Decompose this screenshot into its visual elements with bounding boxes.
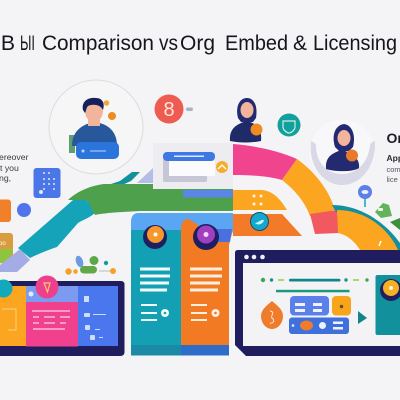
arc: red segment (310, 210, 339, 234)
status row (261, 278, 369, 282)
icon: blue keypad tile (34, 168, 60, 198)
title: Org (180, 31, 215, 55)
icon: orange leaf (261, 301, 283, 329)
text block: right side clipped (386, 130, 400, 184)
icon: blue pin (358, 185, 372, 207)
band: blue strip (183, 190, 233, 198)
title: & (293, 31, 307, 55)
icon: blue dot (17, 203, 31, 217)
icon: teal shield badge (278, 114, 300, 136)
text block: right side clipped: lice (386, 175, 398, 184)
arc: teal outer band (332, 205, 400, 255)
bar: yellow-orange upper (233, 190, 287, 210)
band: periwinkle tip (0, 249, 30, 272)
arrow: teal play (358, 311, 367, 324)
panel: person one portrait (49, 80, 143, 174)
icon: tan and green tile (0, 233, 13, 265)
arc: orange right segment (337, 210, 398, 250)
icon: teal badge (0, 280, 12, 298)
window dots (244, 255, 265, 259)
icon: orange share badge (143, 225, 167, 249)
band: green wave (68, 184, 233, 215)
panel: person three portrait (310, 120, 375, 185)
panel: left dashboard (0, 276, 124, 356)
icon: purple badge (193, 224, 219, 250)
icon: pink lightbulb badge (36, 276, 58, 298)
blue block (290, 296, 329, 316)
panel: orange column (181, 219, 232, 356)
icon: green pentagon (375, 203, 392, 218)
panel: floating card (153, 143, 233, 189)
icon: yellow badge (380, 279, 400, 301)
icon: small white tick (379, 241, 381, 246)
title: ЫI (20, 31, 35, 55)
icon: dark green tile (390, 218, 400, 230)
panel: right dashboard (235, 250, 400, 356)
icon: red number badge: 8 (163, 99, 175, 121)
arc: pink segment (233, 144, 297, 180)
panel: person two portrait (230, 98, 262, 142)
band: periwinkle triangle (137, 168, 153, 183)
teal panel (376, 275, 400, 335)
panel: teal column (131, 213, 233, 356)
bar: orange lower (233, 214, 302, 236)
title: Comparison (42, 31, 154, 55)
band: teal accent stripes (108, 172, 140, 185)
text block: left side clipped (0, 152, 29, 183)
text block: left side clipped: t you (0, 163, 19, 173)
title: vs (159, 31, 178, 55)
title: Embed (225, 31, 288, 55)
yellow block (332, 296, 351, 316)
decoration: central small cluster (65, 255, 116, 275)
icon: red number badge (154, 94, 193, 124)
icon: orange tile (0, 200, 11, 222)
title (0, 31, 397, 55)
blue control bar (289, 318, 349, 334)
icon: teal circle badge (250, 212, 268, 230)
arc: orange segment (282, 159, 335, 216)
band: teal diagonal (18, 200, 95, 258)
